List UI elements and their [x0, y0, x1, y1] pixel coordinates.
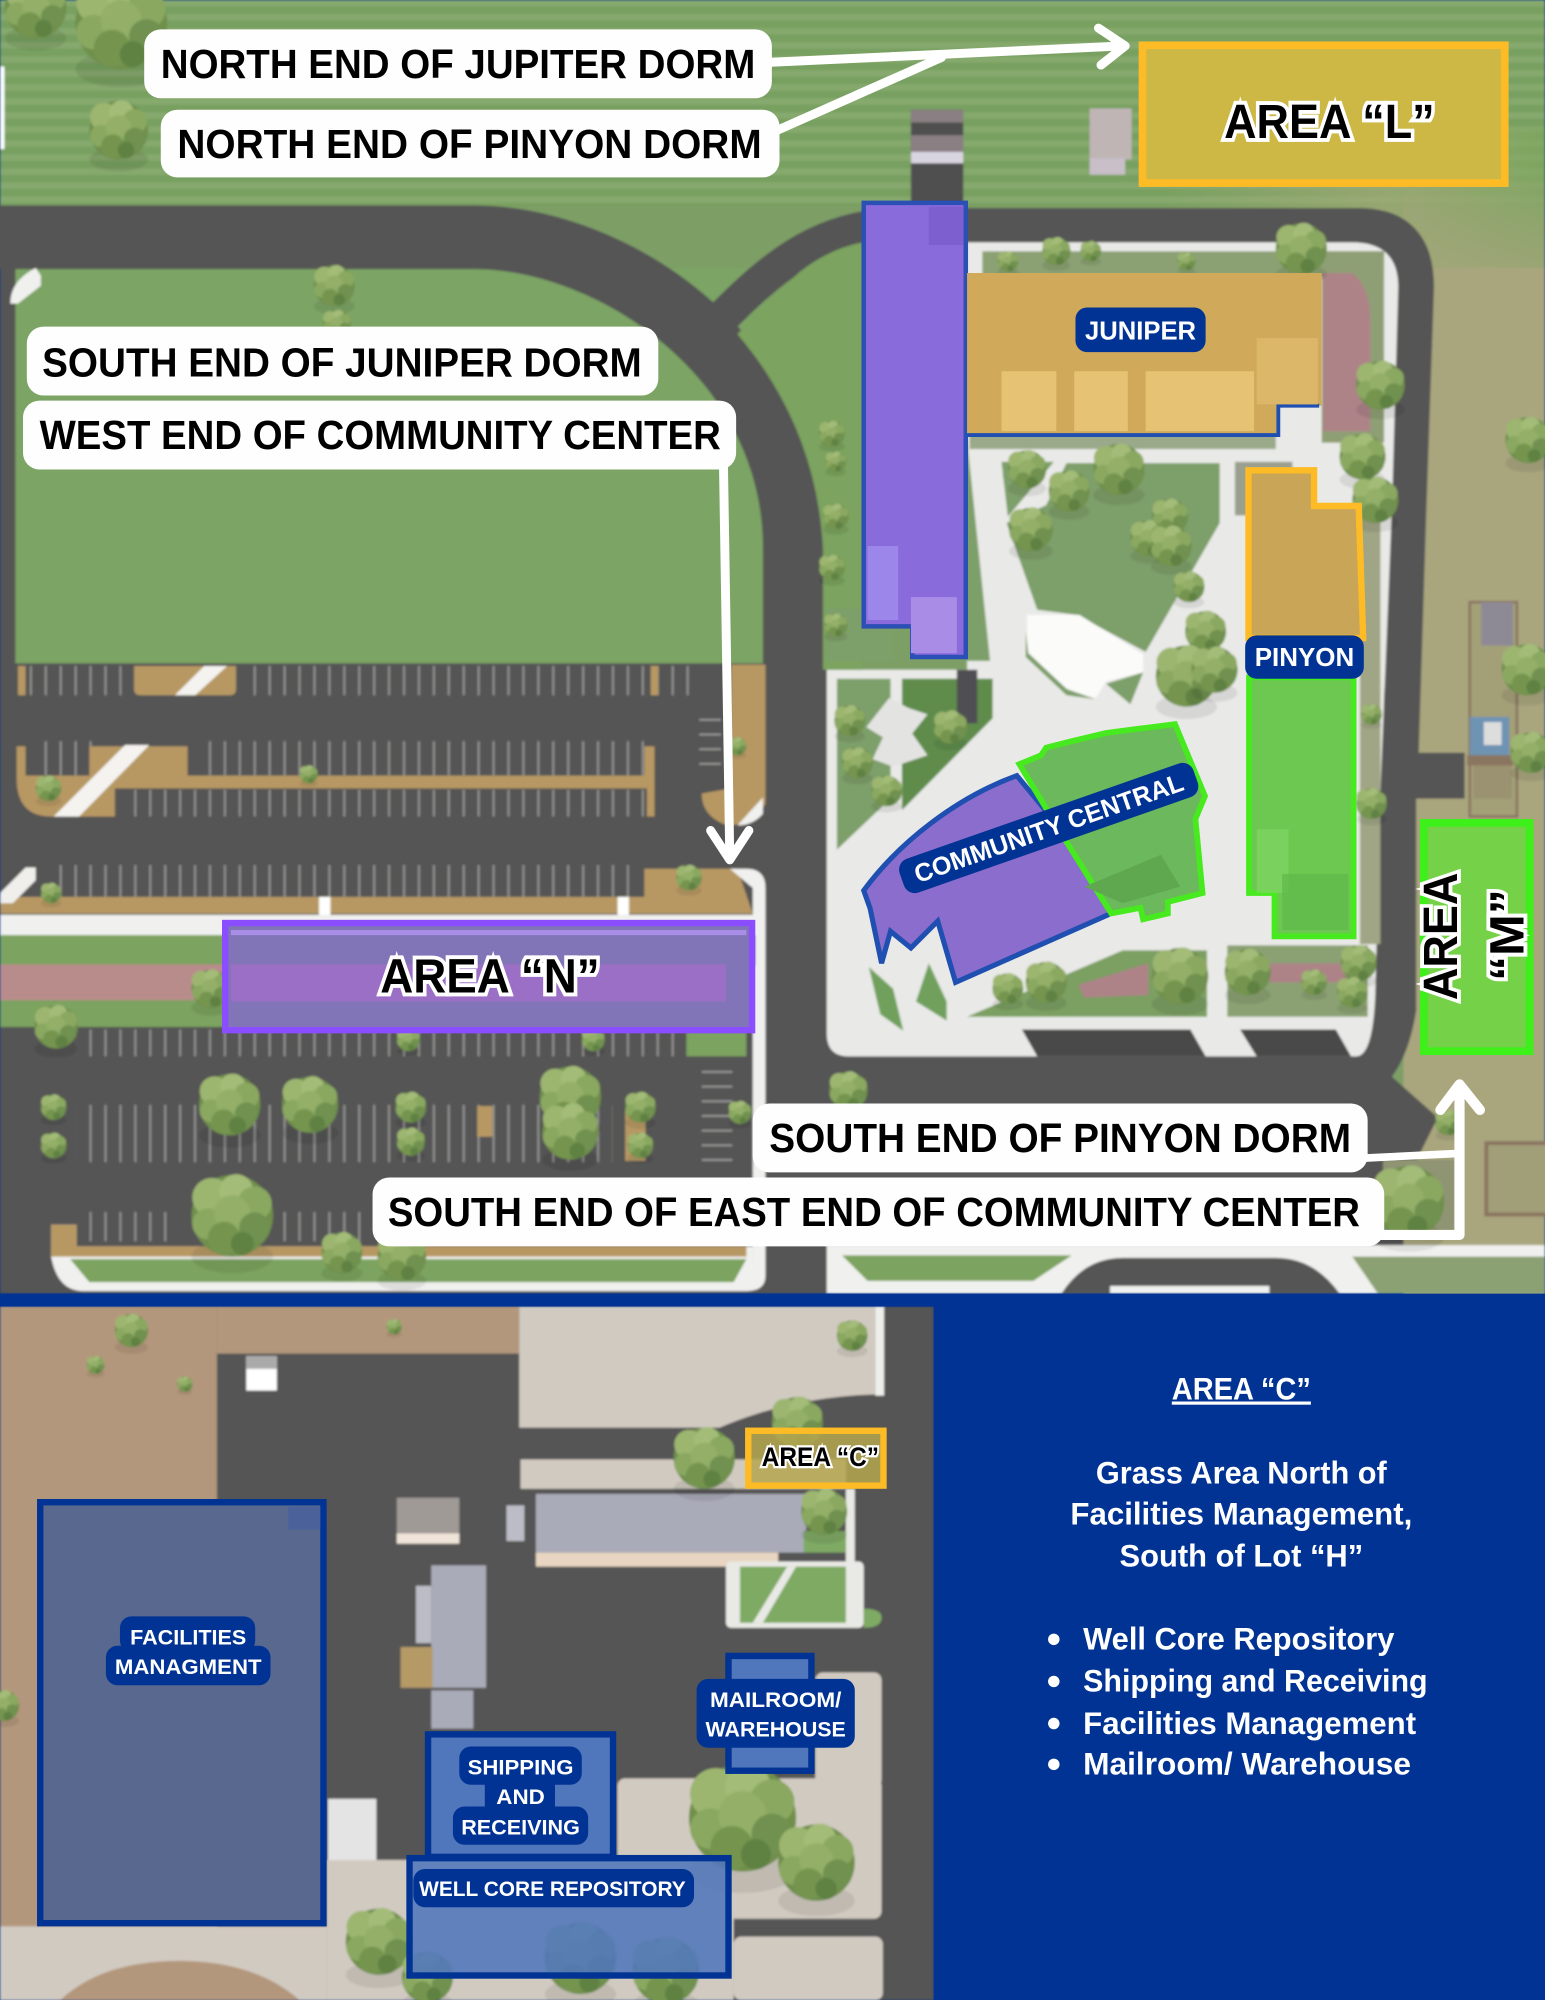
location description: [1070, 1455, 1412, 1574]
label: south end of Juniper dorm: SOUTH END OF JUNIPER DORM: [42, 339, 642, 385]
panel heading: AREA “C”: [1172, 1371, 1311, 1407]
location description: Facilities Management,: [1070, 1496, 1412, 1532]
area M: “M”: [1480, 889, 1534, 981]
area C: AREA “C”: [762, 1442, 879, 1472]
label: well core repository: [413, 1869, 694, 1907]
building: Community Central east wing: [864, 776, 1111, 982]
label: Community Central: COMMUNITY CENTRAL: [911, 769, 1187, 889]
label: west end of community center: [23, 401, 736, 469]
label: north end of Jupiter dorm: [144, 29, 772, 98]
building: Pinyon dorm north end: [1248, 470, 1363, 638]
label: mailroom warehouse: [697, 1679, 855, 1748]
building: well core repository: [410, 1858, 728, 1976]
label: shipping and receiving: RECEIVING: [461, 1815, 580, 1840]
building: mailroom and warehouse: [728, 1656, 811, 1771]
bullet list: Facilities Management: [1083, 1705, 1416, 1741]
label: Juniper: JUNIPER: [1085, 317, 1196, 345]
label: Pinyon: PINYON: [1255, 644, 1354, 672]
label: south end of Pinyon dorm: [753, 1104, 1368, 1172]
label: mailroom warehouse: MAILROOM/: [710, 1687, 841, 1712]
label: Juniper: [1075, 307, 1206, 352]
label: shipping and receiving: SHIPPING: [468, 1755, 573, 1780]
building: Juniper dorm: [967, 273, 1322, 435]
location description: South of Lot “H”: [1120, 1538, 1363, 1574]
campus map: upper section: [0, 0, 1545, 1301]
area M: AREA: [1414, 873, 1468, 1000]
label: north end of Jupiter dorm: NORTH END OF JUPITER DORM: [161, 41, 755, 87]
label: north end of Pinyon dorm: NORTH END OF PINYON DORM: [177, 121, 762, 167]
building: facilities management: [40, 1502, 323, 1923]
area L: AREA “L”: [1224, 95, 1435, 149]
label: mailroom warehouse: WAREHOUSE: [706, 1716, 846, 1741]
label: south end of east end of community center: [373, 1178, 1384, 1246]
label: north end of Pinyon dorm: [161, 110, 780, 177]
panel: area C description: [934, 1306, 1545, 2000]
label: south end of Juniper dorm: [27, 327, 658, 395]
label: shipping and receiving: AND: [496, 1784, 545, 1809]
label: shipping and receiving: [453, 1747, 588, 1845]
bullet list: Mailroom/ Warehouse: [1083, 1746, 1411, 1782]
label: facilities management: FACILITIES: [130, 1624, 246, 1649]
label: Pinyon: [1245, 635, 1364, 679]
label: well core repository: WELL CORE REPOSITORY: [419, 1876, 686, 1901]
building: shipping and receiving: [428, 1734, 613, 1857]
bullet list: Shipping and Receiving: [1083, 1663, 1428, 1699]
building: Community Central west wing: [1019, 724, 1205, 919]
bullet list: Well Core Repository: [1083, 1621, 1395, 1657]
area M: [1414, 823, 1534, 1051]
area C: [748, 1431, 883, 1486]
area N: AREA “N”: [380, 950, 600, 1004]
building: purple dorm wing: [864, 203, 966, 657]
arrow: to area M: [1359, 1084, 1480, 1235]
location description: Grass Area North of: [1096, 1455, 1387, 1491]
label: south end of east end of community center: SOUTH END OF EAST END OF COMMUNITY CENTER: [388, 1189, 1360, 1235]
area L: [1142, 45, 1505, 183]
label: south end of Pinyon dorm: SOUTH END OF PINYON DORM: [769, 1115, 1351, 1161]
arrow: to area N: [711, 459, 749, 860]
building: Pinyon dorm south end: [1249, 677, 1354, 936]
area N: [225, 923, 752, 1030]
bullet list: [1048, 1621, 1428, 1782]
facilities map: lower section: [0, 1306, 934, 2000]
label: facilities management: [106, 1616, 270, 1685]
label: facilities management: MANAGMENT: [115, 1654, 262, 1679]
divider band: [0, 1294, 1545, 1306]
label: west end of community center: WEST END OF COMMUNITY CENTER: [40, 412, 721, 458]
arrow: to area L: [765, 28, 1125, 133]
